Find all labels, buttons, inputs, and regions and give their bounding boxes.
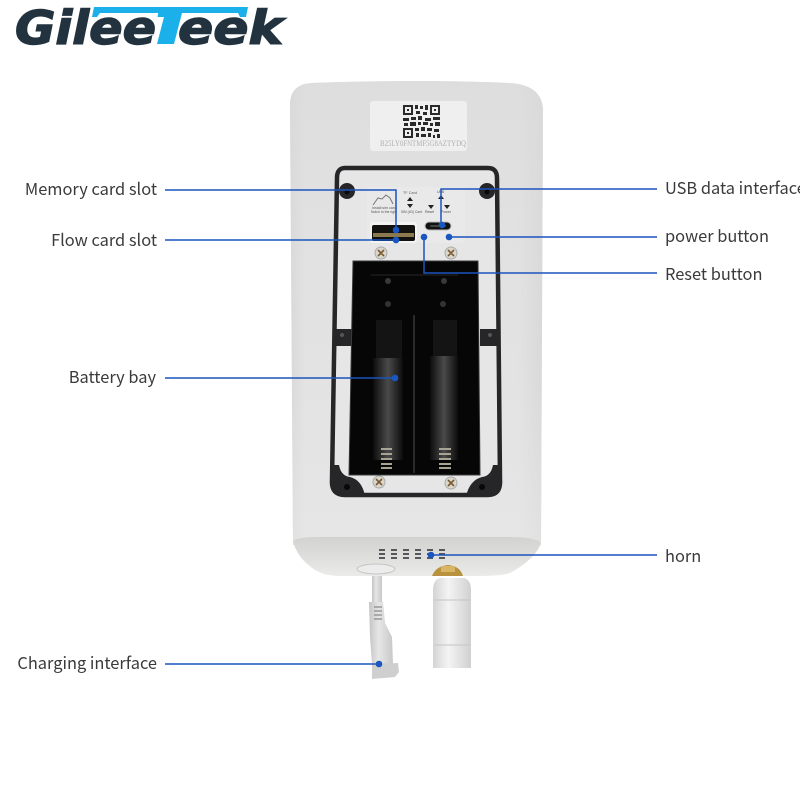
- QR code: [403, 105, 440, 138]
- plate markings: [371, 190, 452, 214]
- logo wordmark end: eek: [178, 1, 286, 55]
- callout: battery bay: [69, 364, 398, 388]
- battery cell left: [373, 358, 403, 460]
- callout: horn: [428, 543, 701, 567]
- callout: flow card slot: Flow card slot: [51, 227, 157, 251]
- camera body: [290, 81, 543, 576]
- plate markings: Install sim card: [372, 206, 396, 210]
- plate markings: SIM (4G) Card: [401, 210, 422, 214]
- SIM and memory card slot: [370, 222, 417, 243]
- battery bay: [349, 261, 480, 475]
- plate markings: Notch to the right: [371, 210, 397, 214]
- plate markings: TF Card: [403, 191, 417, 195]
- battery cell right: [430, 356, 458, 460]
- plate markings: Reset: [425, 210, 434, 214]
- logo blue T: [92, 2, 248, 54]
- serial number: B25LY0FNTMF5G8AZTYDQ: [380, 139, 466, 148]
- gasket frame: [332, 168, 500, 496]
- callout: memory card slot: [25, 176, 399, 233]
- logo: [15, 1, 286, 55]
- logo blue T: T: [155, 2, 180, 54]
- callout: charging interface: Charging interface: [17, 650, 157, 674]
- charging cable: [369, 573, 399, 679]
- plate markings: USB: [437, 190, 445, 194]
- callout: horn: horn: [665, 543, 701, 567]
- callout: power button: [446, 223, 769, 247]
- bottom face with speaker grille: [293, 537, 541, 576]
- callout: USB data interface: [439, 175, 800, 228]
- plate markings: Power: [441, 210, 452, 214]
- antenna: [433, 578, 471, 668]
- QR label: [370, 101, 467, 151]
- callout: power button: power button: [665, 223, 769, 247]
- callout: memory card slot: Memory card slot: [25, 176, 157, 200]
- screws: [373, 247, 457, 489]
- port plate: [367, 187, 465, 243]
- callout: reset button: [421, 234, 762, 285]
- callout: battery bay: Battery bay: [69, 364, 156, 388]
- callout: reset button: Reset button: [665, 261, 762, 285]
- logo wordmark start: Gilee: [15, 1, 156, 55]
- callout: flow card slot: [51, 227, 399, 251]
- USB-C port: [425, 222, 451, 230]
- springs: [381, 449, 451, 468]
- callout: charging interface: [17, 650, 382, 674]
